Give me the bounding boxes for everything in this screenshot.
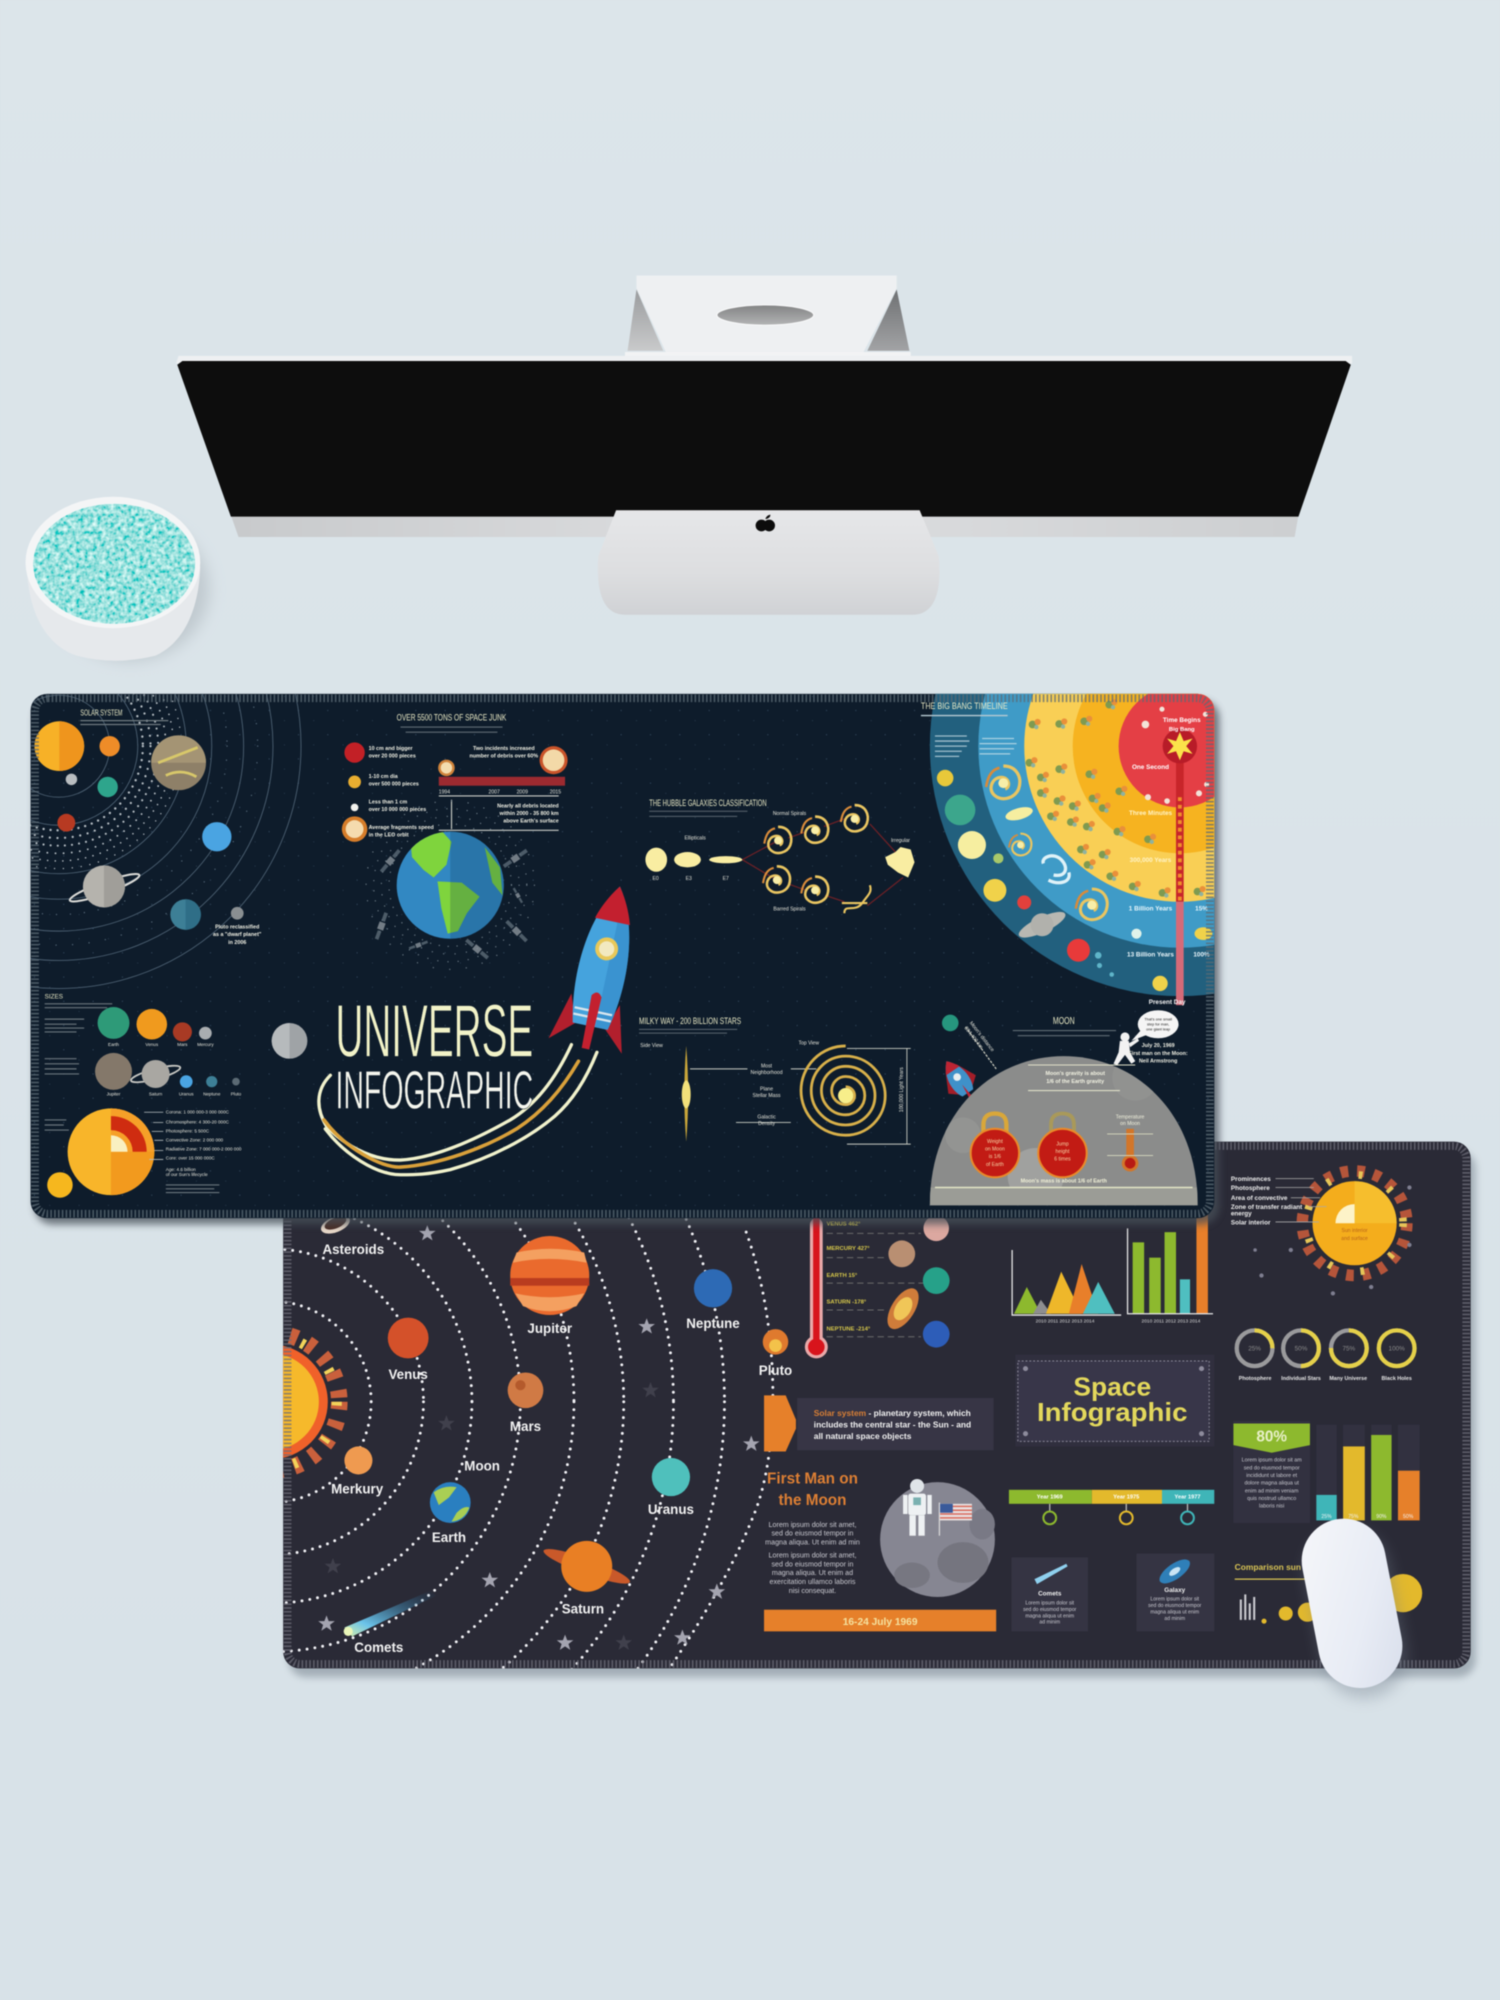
percentage bars — [1316, 1425, 1420, 1520]
red core items — [1142, 707, 1209, 804]
timeline bar — [1009, 1490, 1214, 1524]
moon text block: Lorem ipsum dolor sit amet, — [769, 1521, 856, 1529]
planet: Pluto with note: in 2006 — [228, 940, 246, 946]
mini planets: Mercury — [197, 1042, 214, 1047]
sun data lines: Corona: 1 000 000-3 000 000C — [166, 1110, 230, 1115]
planet: Saturn — [68, 865, 141, 908]
panel: solar system note: includes the central star - the Sun - and — [814, 1419, 971, 1429]
hubble galaxy diagram: Irregular — [891, 838, 910, 844]
moon dome: 1/6 of the Earth gravity — [1046, 1079, 1104, 1085]
space junk legend: over 500 000 pieces — [369, 782, 419, 788]
astronaut — [1114, 1032, 1139, 1065]
milky way top view spiral — [798, 1041, 911, 1144]
card: comets: Comets — [1038, 1591, 1062, 1598]
icon: apple logo — [756, 515, 775, 531]
rocket — [548, 879, 656, 1056]
note near rocket path — [963, 1020, 996, 1069]
earth with debris — [366, 801, 534, 969]
temperature scale labels: SATURN -178° — [827, 1300, 867, 1306]
scene: desk with monitor, bowl and two mats — [25, 276, 1480, 1704]
timeline bar: Year 1975 — [1113, 1495, 1139, 1501]
milky way side view: Neighborhood — [751, 1070, 783, 1076]
temperature gauge: on Moon — [1120, 1121, 1140, 1127]
planet: Pluto — [763, 1329, 788, 1355]
card: comets: ad minim — [1039, 1620, 1060, 1626]
card: galaxy: magna aliqua ut enim — [1150, 1610, 1199, 1616]
moon text block: nisi consequat. — [789, 1587, 836, 1595]
ring labels: Time Begins — [1163, 717, 1201, 724]
panel: solar system note: all natural space objects — [814, 1431, 912, 1441]
hubble galaxy diagram: E0 — [652, 876, 659, 882]
debris timeline — [438, 746, 568, 830]
asteroid — [320, 1218, 350, 1234]
percentage bars: 50% — [1403, 1514, 1414, 1520]
mat 2: space infographic — [282, 1140, 1480, 1681]
planet: Pluto with note — [213, 907, 262, 946]
ring gauges — [1237, 1330, 1415, 1382]
milky way side view: Most — [761, 1064, 773, 1070]
bar chart: green bars: 2010 2011 2012 2013 2014 — [1142, 1319, 1201, 1325]
stars — [318, 1225, 760, 1650]
big sun cross-section — [47, 1108, 154, 1198]
weight: jump: height — [1056, 1149, 1070, 1155]
gauge captions: Photosphere — [1239, 1376, 1271, 1382]
monitor base — [598, 510, 939, 615]
planet: Venus — [388, 1318, 429, 1358]
yellow ring clusters — [1026, 699, 1206, 898]
planet: Saturn — [541, 1541, 633, 1592]
planet: Mars — [508, 1372, 543, 1408]
planet: Mercury — [344, 1446, 372, 1474]
space junk legend: 10 cm and bigger — [369, 746, 413, 752]
temperature scale labels: EARTH 15° — [827, 1273, 858, 1279]
sun layer labels: Solar interior — [1231, 1219, 1271, 1226]
gauge 100% — [1379, 1330, 1415, 1366]
weight: your weight: Weight — [987, 1139, 1003, 1145]
solar system orbits — [282, 1218, 775, 1670]
mini planets chart header text — [45, 994, 112, 1130]
percentage bars: 25% — [1321, 1514, 1332, 1520]
debris timeline: 1994 — [439, 789, 450, 795]
moon dome: Moon's gravity is about — [1046, 1071, 1105, 1077]
debris timeline: Nearly all debris located — [497, 803, 559, 809]
moon landing note: First man on the Moon: — [1129, 1051, 1188, 1057]
gauge 75%: 75% — [1342, 1346, 1356, 1353]
heading: Moon — [1013, 1016, 1116, 1036]
panel: title Space Infographic — [1015, 1355, 1214, 1446]
sun layer labels: Photosphere — [1231, 1185, 1270, 1192]
planet: Neptune — [694, 1269, 732, 1307]
panel: comparison sun size — [1235, 1562, 1422, 1624]
weight: your weight: of Earth — [986, 1162, 1004, 1168]
note near rocket path: Moon's distance — [968, 1020, 995, 1053]
wireless mouse — [1294, 1511, 1413, 1705]
sun data lines: Photosphere: 5 500C — [166, 1129, 210, 1134]
sun data lines: of our Sun's lifecycle — [166, 1172, 208, 1177]
gauge captions: Individual Stars — [1281, 1376, 1321, 1382]
temperature gauge — [1107, 1115, 1153, 1172]
card: comets — [1011, 1557, 1088, 1631]
panel: title Space Infographic: Space — [1073, 1373, 1151, 1401]
heading: Solar System — [80, 709, 168, 724]
monitor black back panel — [177, 361, 1351, 517]
mat 1: universe infographic — [0, 496, 1430, 1224]
heading: space junk — [397, 712, 507, 732]
temperature scale labels: NEPTUNE -214° — [827, 1326, 871, 1332]
mini planets chart header text: SIZES — [45, 994, 63, 1001]
heading: Solar System: SOLAR SYSTEM — [80, 709, 123, 718]
debris cloud — [366, 801, 534, 969]
scattered dots — [1253, 1185, 1412, 1296]
temperature scale labels: VENUS 462° — [827, 1222, 861, 1228]
percentage bars: 75% — [1348, 1514, 1359, 1520]
label: Moon: Moon — [464, 1459, 500, 1474]
moon text block: Lorem ipsum dolor sit amet, — [769, 1551, 856, 1559]
ring labels: 1 Billion Years — [1129, 906, 1173, 913]
weight: jump: 6 times — [1054, 1157, 1071, 1163]
small earth — [942, 1015, 959, 1031]
panel: solar system note: Solar system - planetary system, which — [814, 1408, 971, 1418]
panel: 80% callout: Lorem ipsum dolor sit am — [1242, 1458, 1302, 1464]
milky way top view spiral: 100,000 Light Years — [899, 1067, 905, 1112]
milky way side view: Stellar Mass — [753, 1093, 781, 1099]
date bar: 16-24 July 1969 — [843, 1617, 918, 1628]
space junk legend: Less than 1 cm — [369, 800, 407, 806]
area chart — [1012, 1250, 1121, 1325]
space junk legend — [342, 742, 434, 842]
space junk legend: 1-10 cm dia — [369, 774, 398, 780]
gauge 50%: 50% — [1295, 1346, 1308, 1353]
astronaut — [903, 1479, 932, 1536]
ring labels: Three Minutes — [1129, 810, 1173, 817]
space junk legend: over 20 000 pieces — [369, 754, 416, 760]
sun data lines: Radiative Zone: 7 000 000-2 000 000 — [166, 1147, 242, 1152]
weight: jump — [1038, 1114, 1087, 1177]
card: comets: Lorem ipsum dolor sit — [1025, 1601, 1075, 1607]
panel: 80% callout: incididunt ut labore et — [1246, 1473, 1298, 1479]
planet: Jupiter — [151, 735, 206, 790]
milky way top view spiral: Top View — [798, 1041, 819, 1047]
heading: First Man on the Moon — [767, 1470, 858, 1509]
heading: Hubble — [649, 797, 767, 816]
heading: First Man on the Moon: First Man on — [767, 1470, 858, 1487]
speech bubble: one giant leap — [1146, 1028, 1170, 1032]
sun layer labels: Prominences — [1231, 1176, 1271, 1183]
speech bubble — [1131, 1010, 1179, 1041]
heading: First Man on the Moon: the Moon — [779, 1492, 846, 1509]
planet: Uranus — [202, 822, 232, 851]
moon text block: magna aliqua. Ut enim ad min — [765, 1539, 860, 1547]
space junk legend: over 10 000 000 pieces — [369, 807, 426, 813]
mat 2 stitched edge — [288, 1146, 1466, 1664]
mini planets: Jupiter — [107, 1092, 121, 1097]
ring text block — [935, 736, 1017, 756]
stand cable hole — [717, 305, 814, 325]
weight: your weight: is 1/6 — [989, 1154, 1001, 1160]
inner planets — [57, 736, 120, 832]
weight: jump: Jump — [1056, 1141, 1069, 1147]
monitor stand arm — [628, 276, 909, 352]
panel: 80% callout: sed do eiusmod tempor — [1244, 1465, 1300, 1471]
gauge 25%: 25% — [1248, 1346, 1261, 1353]
temperature planets — [881, 1216, 950, 1348]
weight: your weight: on Moon — [985, 1147, 1005, 1153]
outer ring objects — [937, 770, 1168, 991]
moon dome — [930, 1055, 1198, 1205]
label: Comets: Comets — [354, 1640, 403, 1655]
milky way side view: Side View — [640, 1043, 663, 1049]
label: Neptune: Neptune — [686, 1316, 740, 1331]
temperature scale labels: MERCURY 427° — [827, 1246, 870, 1252]
sun diagram top right: and surface — [1341, 1236, 1368, 1242]
temperature gauge: Temperature — [1116, 1115, 1145, 1121]
moon text block: sed do eiusmod tempor in — [772, 1530, 854, 1538]
ring labels: 15% — [1195, 906, 1208, 913]
planet: Uranus — [652, 1458, 690, 1496]
hubble galaxy diagram: E3 — [686, 876, 692, 882]
heading: Moon: MOON — [1053, 1016, 1075, 1027]
planet: Neptune — [170, 899, 201, 930]
area chart: 2010 2011 2012 2013 2014 — [1036, 1319, 1095, 1325]
panel: comparison sun size: Comparison sun size — [1235, 1562, 1320, 1572]
gauge 25% — [1237, 1330, 1272, 1366]
moon dome: Moon's mass is about 1/6 of Earth — [1021, 1178, 1107, 1184]
moon landing note: Neil Armstrong — [1139, 1058, 1177, 1064]
label: Asteroids: Asteroids — [322, 1242, 384, 1257]
percentage bars: 90% — [1376, 1514, 1387, 1520]
gauge captions — [1239, 1376, 1412, 1382]
gauge 50% — [1283, 1330, 1319, 1366]
moon landing note — [1129, 1043, 1188, 1064]
moon text block: magna aliqua. Ut enim ad — [772, 1569, 853, 1577]
card: galaxy: sed do eiusmod tempor — [1148, 1603, 1202, 1609]
sun data lines: Chromosphere: 4 300-20 000C — [166, 1120, 230, 1125]
debris timeline: 2007 — [489, 789, 500, 795]
mini planets: Uranus — [179, 1092, 194, 1097]
heading: space junk: OVER 5500 TONS OF SPACE JUNK — [397, 712, 507, 723]
ring labels: 300,000 Years — [1130, 857, 1172, 864]
title: INFOGRAPHIC: INFOGRAPHIC — [335, 1061, 533, 1120]
panel: 80% callout: 80% — [1256, 1428, 1287, 1445]
rocket flame trails — [319, 1045, 597, 1175]
card: comets: magna aliqua ut enim — [1025, 1613, 1074, 1619]
timeline thermometer — [1163, 729, 1197, 1005]
mini planets: Venus — [145, 1042, 159, 1047]
sun layer labels — [1231, 1176, 1327, 1226]
label: Saturn: Saturn — [562, 1602, 604, 1617]
panel: 80% callout: laboris nisi — [1259, 1504, 1284, 1510]
panel: 80% callout: dolore magna aliqua ut — [1244, 1481, 1299, 1487]
thermometer — [805, 1218, 828, 1358]
ring labels: Present Day — [1149, 999, 1186, 1006]
debris timeline: Two incidents increased — [473, 746, 535, 752]
gauge captions: Black Holes — [1382, 1376, 1412, 1382]
ring labels: One Second — [1132, 764, 1169, 771]
heading: big bang timeline: THE BIG BANG TIMELINE — [921, 701, 1008, 711]
panel: 80% callout: quis nostrud ullamco — [1247, 1496, 1296, 1502]
sun layer labels: Zone of transfer radiant — [1231, 1204, 1303, 1211]
space junk legend: in the LEO orbit — [369, 833, 409, 839]
panel: 80% callout — [1233, 1421, 1310, 1523]
sun data lines — [144, 1110, 242, 1193]
big bang timeline rings — [921, 496, 1430, 1006]
flag — [939, 1503, 972, 1536]
milky way side view: Density — [758, 1121, 776, 1127]
bar chart: green bars — [1128, 1212, 1213, 1325]
gauge 75% — [1331, 1330, 1367, 1366]
weight: your weight — [971, 1114, 1019, 1177]
speech bubble: step for man, — [1147, 1023, 1169, 1027]
note near rocket path: 384,400 km — [963, 1026, 984, 1050]
moon text block: sed do eiusmod tempor in — [772, 1560, 854, 1568]
card: galaxy — [1136, 1554, 1214, 1631]
label: Venus: Venus — [388, 1367, 428, 1382]
timeline bar: Year 1977 — [1175, 1495, 1200, 1501]
card: galaxy: Lorem ipsum dolor sit — [1150, 1597, 1200, 1603]
label: Merkury: Merkury — [331, 1482, 384, 1497]
mat 1 stitched edge — [35, 698, 1210, 1214]
milky way side view — [640, 1043, 816, 1142]
planet: Pluto with note: Pluto reclassified — [215, 925, 259, 931]
label: Pluto: Pluto — [759, 1363, 792, 1378]
ring labels: 13 Billion Years — [1127, 952, 1174, 959]
mini planets: Earth — [108, 1042, 119, 1047]
moon landing note: July 20, 1969 — [1142, 1043, 1175, 1049]
ring labels: Big Bang — [1169, 727, 1195, 733]
solar system orbits and asteroid dots — [0, 504, 301, 989]
panel: solar system note — [764, 1395, 994, 1452]
satellites — [374, 848, 529, 960]
mini planets: Saturn — [149, 1092, 163, 1097]
small rocket — [933, 1052, 989, 1113]
sun (solar system) — [34, 721, 84, 771]
card: comets: sed do eiusmod tempor — [1023, 1607, 1077, 1613]
teal salt — [33, 504, 195, 624]
sun diagram top right — [1302, 1171, 1407, 1276]
monitor — [176, 352, 1352, 537]
ring labels: 100% — [1193, 952, 1210, 959]
speech bubble: That's one small — [1144, 1017, 1172, 1021]
space junk legend: Average fragments speed — [369, 825, 434, 831]
date bar — [764, 1610, 996, 1631]
mini planets: Pluto — [231, 1092, 242, 1097]
hubble galaxy diagram — [645, 805, 915, 913]
hubble galaxy diagram: Ellipticals — [685, 835, 706, 841]
sun data lines: Core: over 15 000 000C — [166, 1155, 215, 1160]
bowl of teal bath salt — [26, 497, 209, 661]
label: Mars: Mars — [510, 1419, 541, 1434]
blue ring galaxies — [986, 766, 1212, 940]
moon text block: exercitation ullamco laboris — [770, 1578, 856, 1586]
ring labels — [1127, 717, 1210, 1006]
card: galaxy: ad minim — [1164, 1616, 1185, 1622]
sun data lines: Convective Zone: 2 000 000 — [166, 1138, 224, 1143]
title: UNIVERSE: UNIVERSE — [335, 990, 533, 1073]
planet: Jupiter — [510, 1236, 589, 1315]
sun data lines: Age: 4.6 billion — [166, 1167, 196, 1172]
label: Earth: Earth — [432, 1530, 466, 1545]
panel: title Space Infographic: Infographic — [1037, 1399, 1187, 1427]
debris timeline: 2015 — [550, 789, 561, 795]
moon with astronaut and flag — [880, 1479, 995, 1597]
temperature scale labels — [827, 1222, 923, 1337]
mini planets — [95, 1007, 242, 1097]
panel: 80% callout: enim ad minim veniam — [1245, 1488, 1299, 1494]
hubble galaxy diagram: Barred Spirals — [773, 907, 806, 913]
timeline bar: Year 1969 — [1037, 1495, 1063, 1501]
milky way side view: Plane — [760, 1087, 773, 1093]
sun layer labels: energy — [1231, 1211, 1252, 1218]
milky way side view: Galactic — [757, 1115, 776, 1121]
planet: Earth — [430, 1482, 471, 1523]
heading: Milky Way — [639, 1015, 741, 1033]
comet — [344, 1591, 436, 1636]
label: Uranus: Uranus — [648, 1502, 694, 1517]
gauge 100%: 100% — [1389, 1346, 1405, 1353]
debris timeline: number of debris over 60% — [470, 754, 538, 760]
heading: big bang timeline — [921, 701, 1008, 716]
hubble galaxy diagram: E7 — [723, 876, 729, 882]
heading: Milky Way: MILKY WAY - 200 BILLION STARS — [639, 1015, 741, 1026]
card: galaxy: Galaxy — [1164, 1587, 1186, 1594]
sun layer labels: Area of convective — [1231, 1195, 1288, 1202]
debris timeline: 2009 — [517, 789, 528, 795]
moon disc — [272, 1023, 307, 1059]
sun diagram top right: Sun interior — [1342, 1228, 1368, 1234]
sun — [282, 1327, 348, 1478]
hubble galaxy diagram: Normal Spirals — [773, 811, 807, 817]
gauge captions: Many Universe — [1329, 1376, 1367, 1382]
debris timeline: above Earth's surface — [503, 819, 559, 825]
moon text block — [765, 1521, 860, 1595]
debris timeline: within 2000 - 35 800 km — [499, 811, 559, 817]
mini planets: Neptune — [203, 1092, 221, 1097]
heading: Hubble: THE HUBBLE GALAXIES CLASSIFICATION — [649, 797, 767, 808]
mini planets: Mars — [177, 1042, 188, 1047]
planet: Pluto with note: as a "dwarf planet" — [213, 932, 262, 938]
label: Jupiter: Jupiter — [527, 1321, 572, 1336]
